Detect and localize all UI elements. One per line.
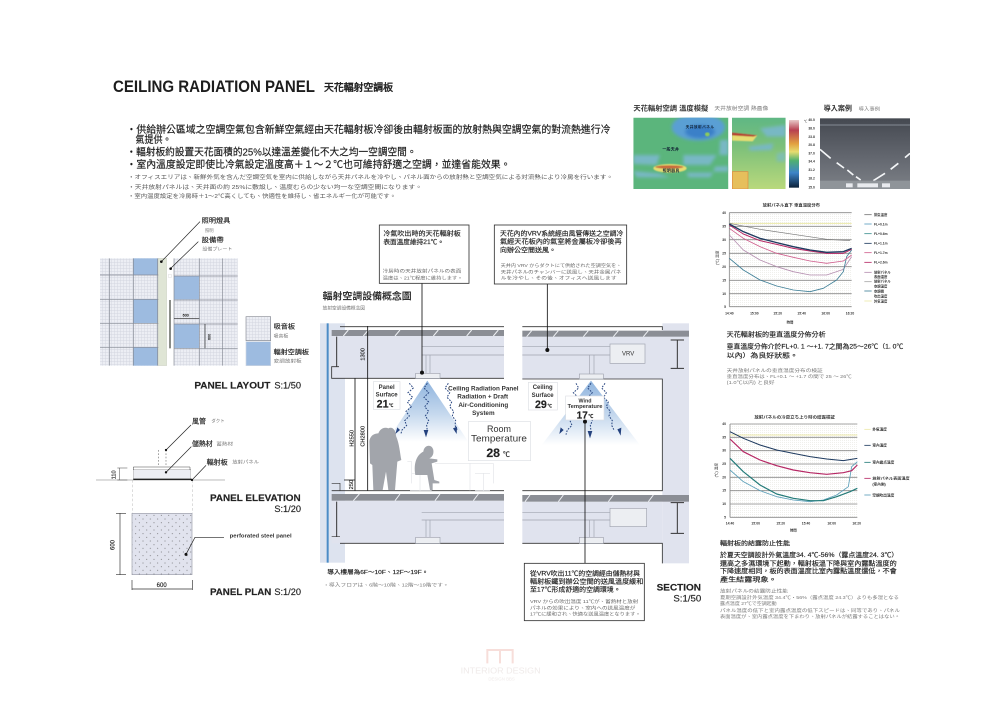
callout: perforated steel panel: perforated steel panel xyxy=(230,534,292,540)
label: wind temperature: Temperature xyxy=(567,404,603,410)
callout: VRV system air: 天井パネルのチャンバーに送風し、天井金属パネ xyxy=(501,268,621,275)
line chart: vertical temperature: 30 xyxy=(722,238,726,242)
callout: radiant panel: 輻射板 xyxy=(207,457,228,466)
line chart: condensation: 10 xyxy=(722,502,726,506)
temperature colour scale: 18.2 xyxy=(808,177,815,181)
line chart: condensation: 15 xyxy=(722,489,726,493)
chart legend: 空調温度 xyxy=(874,283,888,288)
label: panel plan: PANEL PLAN xyxy=(210,587,272,597)
label: panel layout: S:1/50 xyxy=(274,380,301,390)
panel plan: perforated steel xyxy=(132,513,192,575)
line chart: condensation: 時間 xyxy=(790,527,797,532)
callout: insulation: 蓄熱材 xyxy=(216,440,234,447)
intro text block: ・天井放射パネルは、天井面の約 25%に敷設し、温度むらの少ない均一な空調空間になります。 xyxy=(128,183,422,191)
label: ceiling surface: Surface xyxy=(532,393,554,399)
line chart: condensation: 5 xyxy=(724,515,726,519)
legend: panel materials: 変調放射板 xyxy=(274,358,302,365)
chart legend: 室內露点溫度 xyxy=(872,460,895,465)
callout: panel surface temperature: 温度は、21℃程度に維持します。 xyxy=(383,274,463,281)
analysis text: vertical distribution: 天花輻射板的垂直溫度分佈分析 xyxy=(727,330,826,339)
legend: panel materials xyxy=(246,317,310,366)
label: system name: Air-Conditioning xyxy=(458,402,508,409)
label: wind temperature: Wind xyxy=(579,398,591,404)
chart legend: FL+0.1m xyxy=(874,222,888,226)
callout: lighting fixture xyxy=(160,216,231,263)
label: panel surface: Surface xyxy=(376,392,398,398)
label: room temperature xyxy=(468,422,531,461)
label: ceiling surface: ℃ xyxy=(548,404,553,409)
legend: panel materials: 吸音板 xyxy=(274,333,289,340)
chart title: 放射パネルの冷房立ち上り時の結露検証 xyxy=(754,414,835,420)
callout: panel surface temperature: 冷氣吹出時的天花輻射板 xyxy=(383,228,461,237)
callout: equipment band: 設備帶 xyxy=(202,235,224,244)
callout: VRV outlet temperature: 17℃に緩和され、快適な送風温度となります。 xyxy=(530,611,641,618)
dimension: 110: 110 xyxy=(111,470,117,479)
case heading: 導入案例 xyxy=(824,104,852,113)
chart legend: FL+2.6m xyxy=(874,261,888,265)
temperature colour scale: 38.0 xyxy=(808,126,815,130)
analysis text: vertical distribution: 以內）為良好狀態。 xyxy=(727,350,798,359)
chart legend: FL+1.7m xyxy=(874,251,888,255)
label: panel surface: ℃ xyxy=(389,403,394,408)
intro text block: ・供給辦公區域之空調空氣包含新鮮空氣經由天花輻射板冷卻後由輻射板面的放射熱與空調空氣的對流熱進行冷 xyxy=(126,123,610,136)
analysis text: condensation: パネル温度の低下と室内露点温度の低下スピードは、同等であり、パネル xyxy=(720,607,901,614)
dimension: 600: 600 xyxy=(183,314,189,318)
analysis text: condensation: 產生結露現象。 xyxy=(720,574,777,583)
chart legend: FL+0.6m xyxy=(874,232,888,236)
line chart: vertical temperature: 5 xyxy=(724,305,726,309)
temperature colour scale: 34.4 xyxy=(808,160,815,164)
line chart: vertical temperature: (℃) 温度 xyxy=(714,250,719,265)
label: panel surface xyxy=(373,382,400,410)
line chart: vertical temperature: 14:40 xyxy=(725,311,734,315)
thermal image: room view xyxy=(732,118,786,189)
line chart: condensation xyxy=(713,422,861,532)
radiation arrows xyxy=(395,383,621,438)
callout: lighting fixture: 照明 xyxy=(205,228,214,234)
note: installed floors: 導入樓層為6F～10F、12F～19F。 xyxy=(327,568,428,576)
line chart: vertical temperature: 15:40 xyxy=(797,311,806,315)
label: wind temperature: ℃ xyxy=(588,414,593,420)
plan dimensions: 600 xyxy=(111,539,117,550)
temperature colour scale xyxy=(789,118,815,189)
chart legend: 空調機 xyxy=(874,288,885,293)
heading: concept diagram: 輻射空調設備概念圖 xyxy=(323,290,412,302)
plan dimensions xyxy=(111,513,192,590)
panel elevation drawing xyxy=(96,450,225,513)
chart legend: 室內溫度 xyxy=(872,443,887,448)
layout grid xyxy=(100,258,238,366)
analysis text: vertical distribution: 垂直溫度分佈介於FL+0. 1 ～+1. 7之間為25～26℃（1. 0℃ xyxy=(727,342,904,351)
thermal image: ceiling panels xyxy=(633,114,728,189)
label: panel surface: Panel xyxy=(379,385,395,391)
analysis text: condensation: 輻射板的結露防止性能 xyxy=(720,539,790,547)
label: room temperature: ℃ xyxy=(503,451,510,459)
callout: duct: 風管 xyxy=(192,416,206,425)
line chart: condensation: 16:20 xyxy=(852,522,861,526)
note: installed floors: ・導入フロアは、6階～10階、12階～19階です。 xyxy=(323,582,449,589)
watermark: DESIGN BBS xyxy=(488,677,515,682)
callout: VRV outlet temperature: 至17℃形成舒適的空調環境。 xyxy=(530,585,621,594)
chart legend: 外氣溫度 xyxy=(872,427,887,432)
label: room temperature: Room xyxy=(487,424,511,434)
chart legend: FL+1.1m xyxy=(874,242,888,246)
callout: panel surface temperature: 冷房時の天井放射パネルの表面 xyxy=(383,267,462,274)
analysis text: condensation: 露点温度 27℃で空調起動 xyxy=(720,600,777,607)
panel: condensation prevention xyxy=(713,414,910,620)
photo: office ceiling xyxy=(820,118,910,189)
cold air cone: VRV side xyxy=(542,381,640,445)
callout: panel surface temperature: 表面溫度維持21℃。 xyxy=(383,237,444,246)
label: system name: Radiation + Draft xyxy=(457,393,509,400)
intro text block xyxy=(126,123,613,200)
line chart: condensation: 15:40 xyxy=(802,522,810,526)
chart legend xyxy=(864,427,910,497)
thermal image: ceiling panels: 天井放射パネル xyxy=(686,124,714,129)
line chart: vertical temperature: 時間 xyxy=(787,319,794,324)
callout: VRV system air: 天井内 VRV からダクトにて供給された空調空気を、 xyxy=(501,262,621,269)
watermark: INTERIOR DESIGN xyxy=(461,666,541,675)
section: building structure xyxy=(320,323,689,563)
chart title: 放射パネル直下 垂直温度分布 xyxy=(763,202,820,208)
temperature colour scale: 15.0 xyxy=(808,185,815,189)
panel: installation example xyxy=(820,104,910,189)
line chart: condensation: 15:00 xyxy=(751,522,760,526)
dimensions: H2550 xyxy=(349,430,355,447)
line chart: condensation: 25 xyxy=(722,462,726,466)
label: wind temperature xyxy=(566,396,604,421)
callout: VRV outlet temperature: パネルの効果により、室内への送風温度が xyxy=(530,604,636,611)
dimensions: 250 xyxy=(349,480,355,489)
chart legend: 放射パネル xyxy=(874,279,891,284)
chart legend: 表面温度 xyxy=(874,274,888,279)
line chart: vertical temperature: 10 xyxy=(722,292,726,296)
chart legend: 放射パネル表面溫度 xyxy=(872,476,910,481)
callout: VRV system air: 向辦公空間送風。 xyxy=(500,245,556,254)
line chart: vertical temperature: 16:00 xyxy=(821,311,830,315)
chart legend: 排氣溫度 xyxy=(874,212,888,217)
line chart: condensation: 20 xyxy=(722,475,726,479)
chart legend: 放射パネル xyxy=(874,270,891,275)
heading: concept diagram: 放射空調設備概念図 xyxy=(323,304,365,311)
analysis text: vertical distribution: 垂直温度分布は、FL+0.1 ～ +1.7 の間で 25 ～ 26℃ xyxy=(727,373,853,380)
section: building structure: VRV xyxy=(622,352,634,358)
temperature colour scale: ℃ xyxy=(804,120,808,124)
intro text block: ・オフィスエリアは、新鮮外気を含んだ空調空気を室内に供給しながら天井パネルを冷やし、パネル面からの放射熱と空調空気による対流熱により冷房を行います。 xyxy=(128,173,613,181)
thermal heading: 天井放射空調 熱画像 xyxy=(714,105,768,112)
label: room temperature: Temperature xyxy=(471,434,527,444)
chart legend xyxy=(864,212,891,303)
dimensions: CH2800 xyxy=(361,426,367,447)
label: section: SECTION xyxy=(657,583,701,593)
intro text block: 氣提供。 xyxy=(136,133,172,146)
temperature colour scale: 31.2 xyxy=(808,168,815,172)
callout: VRV system air xyxy=(494,225,627,352)
analysis text: vertical distribution xyxy=(727,330,904,386)
callout: perforated steel panel xyxy=(184,534,292,556)
label: section xyxy=(657,583,701,603)
callout: VRV system air: 天花內的VRV系統經由風管傳送之空調冷 xyxy=(500,229,624,238)
line chart: condensation: 30 xyxy=(722,449,726,453)
line chart: vertical temperature: 35 xyxy=(722,225,726,229)
label: ceiling surface: 29 xyxy=(535,399,547,411)
analysis text: vertical distribution: 天井放射パネルの垂直温度分布の検証 xyxy=(727,367,824,374)
line chart: vertical temperature: 15 xyxy=(722,279,726,283)
callout: duct xyxy=(165,416,225,451)
label: system name xyxy=(448,385,519,417)
line chart: condensation: 14:40 xyxy=(726,522,734,526)
callout: equipment band xyxy=(169,235,232,270)
line chart: condensation: 16:00 xyxy=(827,522,836,526)
callout: radiant panel xyxy=(191,457,260,481)
label: panel elevation: PANEL ELEVATION xyxy=(210,493,301,503)
people silhouettes xyxy=(369,428,439,490)
analysis text: condensation: 下降速度相同，板的表面溫度比室內露點溫度還低，不會 xyxy=(720,566,897,575)
label: room temperature: 28 xyxy=(486,446,500,460)
label: panel elevation xyxy=(210,493,301,514)
line chart: vertical temperature xyxy=(714,211,854,324)
chart legend: 外気温度 xyxy=(874,298,888,303)
legend: panel materials: 輻射空調板 xyxy=(274,347,310,356)
cold air cone: panel side xyxy=(387,381,468,442)
line chart: condensation: (℃) 温度 xyxy=(713,463,718,477)
plan dimensions: 600 xyxy=(157,583,167,589)
temperature colour scale: 20.8 xyxy=(808,143,815,147)
legend: panel materials: 吸音板 xyxy=(274,322,296,331)
chart legend: 吹出温度 xyxy=(874,293,888,298)
line chart: condensation: 35 xyxy=(722,435,726,439)
callout: radiant panel: 放射パネル xyxy=(232,458,260,465)
callout: insulation xyxy=(165,439,234,473)
line chart: condensation: 40 xyxy=(722,422,726,426)
panel: section diagram xyxy=(320,225,701,621)
note: installed floors xyxy=(323,568,449,589)
intro text block: ・室內溫度設定即使比冷氣設定溫度高＋１～２℃也可維持舒適之空調，並達省能效果。 xyxy=(126,158,510,171)
dimensions: 1300 xyxy=(361,348,367,361)
panel: thermal simulation xyxy=(633,104,815,189)
callout: VRV outlet temperature: 輻射板鐵到辦公空間的送風溫度緩和 xyxy=(530,576,643,585)
thermal image: ceiling panels: 照明器具 xyxy=(663,167,679,173)
callout: VRV system air: ルを冷やし、その後、オフィスへ送風します xyxy=(501,275,618,282)
furniture outline xyxy=(407,462,493,491)
analysis text: condensation: 放射パネルの結露防止性能 xyxy=(720,588,789,595)
panel: panel layout xyxy=(100,216,310,390)
label: panel surface: 21 xyxy=(377,398,389,410)
callout: panel surface temperature xyxy=(379,225,469,375)
line chart: vertical temperature: 16:20 xyxy=(846,311,854,315)
label: section: S:1/50 xyxy=(673,593,701,603)
callout: duct: ダクト xyxy=(211,418,225,425)
dimension: 600 xyxy=(174,314,211,348)
label: wind temperature: 17 xyxy=(577,410,588,421)
callout: VRV system air: 氣經天花板內的氣室將金屬板冷卻後再 xyxy=(500,237,622,246)
thermal heading: 天花輻射空調 溫度模擬 xyxy=(633,104,709,113)
title: CEILING RADIATION PANEL xyxy=(113,77,315,96)
callout: lighting fixture: 照明燈具 xyxy=(202,216,231,225)
intro text block: ・輻射板約設置天花面積的25%以達溫差變化不大之均一空調空間。 xyxy=(126,146,416,158)
label: panel plan: S:1/20 xyxy=(274,587,301,597)
analysis text: condensation: 於夏天空調設計外氣溫度34. 4℃-56%（露点溫度24. 3℃） xyxy=(720,550,898,559)
analysis text: condensation: 表面温度が、室内露点温度を下まわり、放射パネルが結露することはない。 xyxy=(720,613,900,620)
label: panel elevation: S:1/20 xyxy=(274,504,301,514)
temperature colour scale: 40.0 xyxy=(808,118,815,122)
callout: VRV outlet temperature xyxy=(524,420,644,621)
dimensions xyxy=(344,326,368,491)
panel: elevation and plan xyxy=(96,416,301,597)
line chart: vertical temperature: 25 xyxy=(722,252,726,256)
label: system name: System xyxy=(472,410,495,417)
label: panel layout: PANEL LAYOUT xyxy=(194,380,271,390)
label: panel plan xyxy=(210,587,301,597)
line chart: vertical temperature: 40 xyxy=(722,211,726,215)
title: 天花輻射空調板 xyxy=(324,81,393,94)
line chart: vertical temperature: 15:20 xyxy=(773,311,782,315)
label: panel layout xyxy=(194,380,301,390)
label: system name: Ceiling Radiation Panel xyxy=(448,385,519,392)
dimension: 600: 600 xyxy=(207,334,211,340)
watermark xyxy=(461,650,541,682)
line chart: condensation: 15:20 xyxy=(776,522,785,526)
line chart: vertical temperature: 20 xyxy=(722,265,726,269)
chart legend: (室內側) xyxy=(872,481,887,486)
analysis text: vertical distribution: (1.0℃以内) と良好 xyxy=(727,379,776,386)
analysis text: condensation: 還高之多濕環境下起動，輻射板溫下降與室內露點溫度的 xyxy=(720,559,897,568)
callout: VRV outlet temperature: 從VRV吹出11℃的空調經由儲熱材與 xyxy=(530,568,641,577)
analysis text: condensation: 夏期空調設計外気温度 34.4℃・56%（露点温度 24.3℃）よりも多湿となる xyxy=(720,594,899,601)
chart legend: 空調吹出溫度 xyxy=(872,492,895,497)
heading: concept diagram xyxy=(323,290,412,311)
line chart: vertical temperature: 15:00 xyxy=(750,311,759,315)
temperature colour scale: 37.0 xyxy=(808,151,815,155)
thermal heading xyxy=(633,104,768,113)
thermal image: ceiling panels: 一般天井 xyxy=(662,146,679,152)
label: ceiling surface xyxy=(528,382,557,411)
callout: VRV outlet temperature: VRV からの吹出温度 11℃が、蓄熱材と放射 xyxy=(530,598,639,605)
analysis text: condensation xyxy=(720,539,901,620)
callout: insulation: 儲熱材 xyxy=(192,439,213,448)
intro text block: ・室内温度設定を冷房時＋1～2℃高くしても、快適性を維持し、省エネルギー化が可能です。 xyxy=(128,192,396,200)
callout: equipment band: 設備プレート xyxy=(202,246,232,253)
case heading: 導入事例 xyxy=(859,106,880,113)
panel: vertical temperature distribution xyxy=(714,202,904,386)
case heading xyxy=(824,104,880,113)
temperature colour scale: 23.8 xyxy=(808,135,815,139)
label: ceiling surface: Ceiling xyxy=(533,385,553,391)
